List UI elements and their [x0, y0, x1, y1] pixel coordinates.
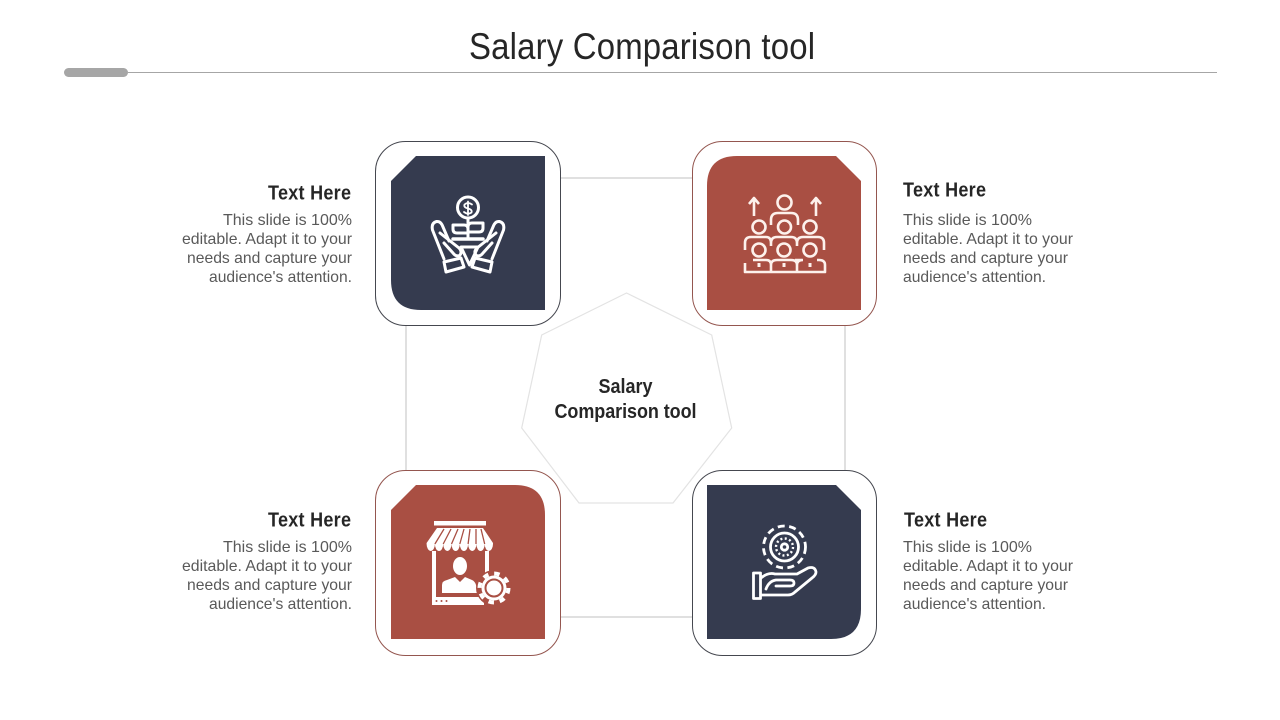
- text block: bottom left: Text Here: [268, 510, 351, 532]
- text block: top right: [903, 180, 1074, 286]
- text block: top right: This slide is 100%: [903, 212, 1032, 229]
- text block: bottom left: needs and capture your: [187, 577, 353, 594]
- title rule with pill accent: [64, 68, 1217, 77]
- text block: top left: This slide is 100%: [223, 212, 352, 229]
- text block: top left: Text Here: [268, 183, 351, 205]
- center label: Salary: [598, 376, 653, 398]
- icon: hands holding money plant: [432, 197, 504, 272]
- text block: bottom left: audience's attention.: [209, 596, 352, 613]
- icon: hand holding coin: [754, 526, 816, 598]
- text block: top right: audience's attention.: [903, 269, 1046, 286]
- panel: bottom right: [692, 470, 876, 656]
- text block: bottom right: [903, 510, 1074, 613]
- central heptagon: [522, 293, 732, 503]
- text block: top right: editable. Adapt it to your: [903, 231, 1074, 248]
- text block: bottom right: needs and capture your: [903, 577, 1069, 594]
- center label: [554, 376, 697, 423]
- text block: bottom left: This slide is 100%: [223, 539, 352, 556]
- text block: top left: editable. Adapt it to your: [182, 231, 353, 248]
- text block: bottom left: [182, 510, 353, 613]
- icon: shop with person and gear: [427, 521, 512, 606]
- panel: top right: [692, 142, 876, 326]
- text block: bottom right: editable. Adapt it to your: [903, 558, 1074, 575]
- text block: top left: audience's attention.: [209, 269, 352, 286]
- panel: top left: [376, 142, 560, 326]
- text block: top right: Text Here: [903, 180, 986, 202]
- text block: bottom left: editable. Adapt it to your: [182, 558, 353, 575]
- text block: top right: needs and capture your: [903, 250, 1069, 267]
- text block: bottom right: Text Here: [904, 510, 987, 532]
- icon: team growth: [745, 196, 825, 272]
- text block: top left: [182, 183, 353, 286]
- text block: top left: needs and capture your: [187, 250, 353, 267]
- panel: bottom left: [376, 470, 560, 656]
- text block: bottom right: This slide is 100%: [903, 539, 1032, 556]
- connector frame: [406, 178, 845, 617]
- text block: bottom right: audience's attention.: [903, 596, 1046, 613]
- title: Salary Comparison tool: [469, 26, 815, 67]
- center label: Comparison tool: [554, 401, 697, 423]
